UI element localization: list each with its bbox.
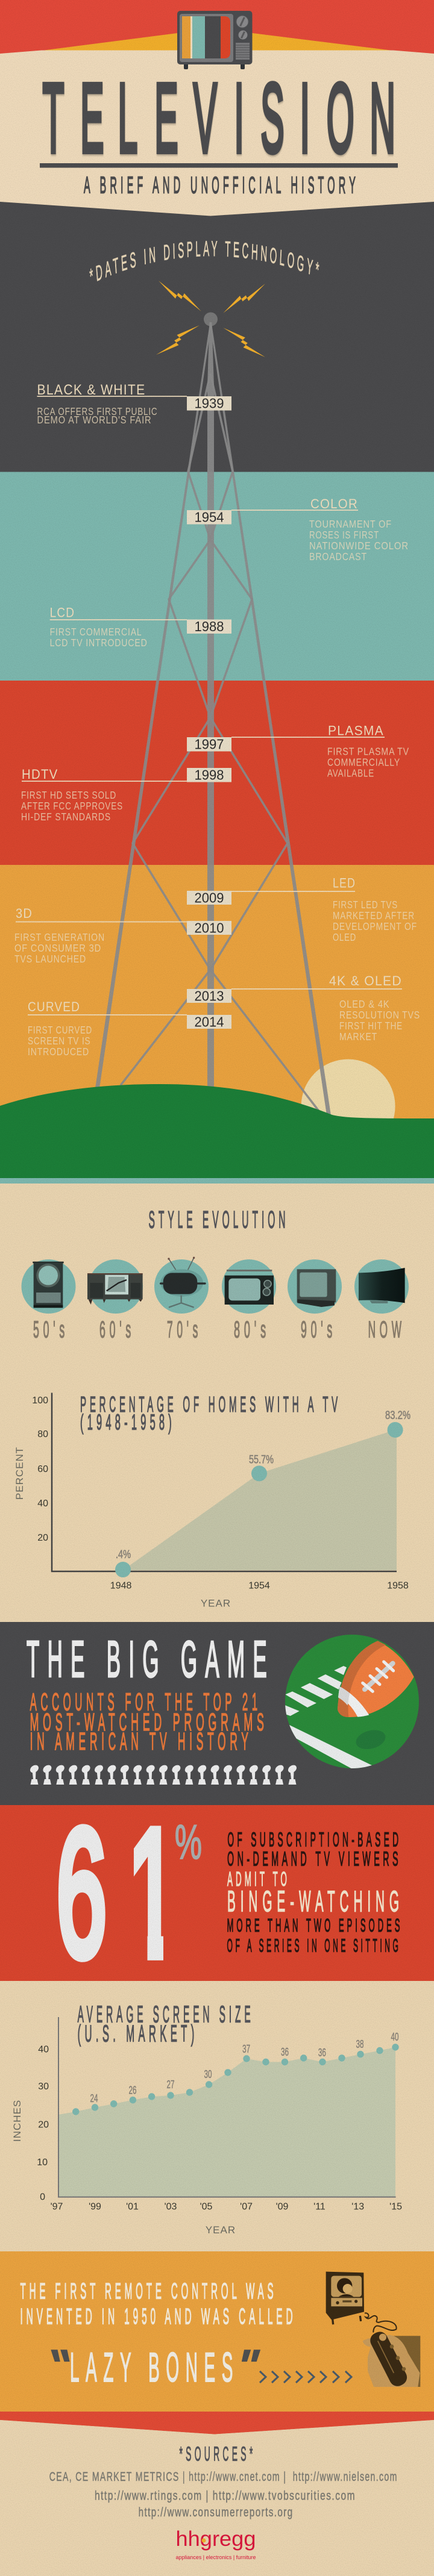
y axis labels: 0	[40, 2192, 45, 2203]
chart: percentage of homes with a tv	[14, 1392, 410, 1609]
x axis labels: '09	[276, 2202, 289, 2212]
x axis labels	[51, 2202, 402, 2212]
timeline: 1939 black and white: RCA OFFERS FIRST PUBLIC	[37, 405, 158, 417]
data labels: 37	[242, 2043, 250, 2055]
data labels: 27	[166, 2079, 175, 2091]
x axis title: YEAR	[206, 2224, 236, 2236]
y axis labels: 100	[32, 1396, 48, 1406]
data labels: 40	[391, 2031, 399, 2043]
chevron arrows	[260, 2371, 351, 2383]
timeline: 2010 3d: OF CONSUMER 3D	[14, 942, 101, 954]
y axis labels: 20	[37, 1533, 48, 1543]
timeline: 2010 3d	[14, 906, 231, 965]
data labels: 55.7%	[249, 1454, 274, 1466]
timeline: 2014 curved: SCREEN TV IS	[28, 1035, 90, 1047]
x axis labels: '15	[389, 2202, 402, 2212]
icon: retro television	[177, 11, 252, 69]
y axis labels: 10	[37, 2157, 48, 2168]
decade labels: 50's	[33, 1317, 69, 1343]
chart title	[80, 1392, 341, 1435]
timeline: 1954 color: BROADCAST	[309, 550, 367, 563]
y axis title: PERCENT	[14, 1447, 25, 1500]
section background: cream footer	[0, 2420, 434, 2576]
timeline: 2009 led: OLED	[333, 931, 356, 943]
icon: 1990s set	[297, 1269, 336, 1307]
timeline: 1939 black and white	[37, 382, 231, 426]
timeline: 1954 color	[187, 496, 409, 563]
icon: tv styles 80s 90s now	[225, 1268, 405, 1307]
x axis labels: 1958	[387, 1580, 409, 1591]
data labels: 24	[90, 2092, 98, 2104]
timeline: 2014 curved: CURVED	[28, 999, 80, 1014]
timeline: 2009 led: LED	[333, 876, 356, 890]
section background: red	[0, 681, 434, 865]
timeline: 1988 lcd: FIRST COMMERCIAL	[50, 626, 142, 638]
icon: twenty one trophies	[29, 1764, 298, 1785]
curved heading: dates in display technology: *DATES IN DISPLAY TECHNOLOGY*	[89, 241, 319, 281]
data labels: 36	[318, 2047, 326, 2059]
timeline: 2014 curved	[28, 999, 231, 1058]
section background: orange	[0, 865, 434, 1124]
timeline: 1998 hdtv: AFTER FCC APPROVES	[21, 800, 123, 812]
y axis labels	[37, 2045, 49, 2203]
timeline: 2010 3d: 2010	[194, 920, 224, 936]
chart axes	[52, 1392, 397, 1571]
chart axes	[58, 2017, 396, 2197]
x axis labels: '03	[165, 2202, 177, 2212]
y axis labels: 40	[37, 1499, 48, 1509]
timeline: 1939 black and white: DEMO AT WORLD'S FAIR	[37, 414, 152, 426]
decade labels: 70's	[167, 1317, 202, 1343]
x axis labels: '97	[51, 2202, 63, 2212]
x axis labels	[110, 1580, 409, 1591]
timeline: 2013 4k and oled: 2013	[194, 988, 224, 1003]
y axis labels: 60	[37, 1464, 48, 1474]
timeline: 1939 black and white: 1939	[194, 395, 224, 411]
decade labels	[33, 1317, 406, 1343]
title: TELEVISION	[43, 63, 395, 173]
x axis title: YEAR	[201, 1597, 231, 1609]
timeline: 2009 led: FIRST LED TVS	[333, 899, 398, 911]
timeline: 2014 curved: INTRODUCED	[28, 1046, 89, 1058]
teal circles behind tv styles	[22, 1259, 409, 1314]
icon: lightning bolts	[154, 277, 268, 361]
timeline: 1998 hdtv: HDTV	[22, 767, 58, 782]
icon: 1950s cabinet	[33, 1262, 64, 1308]
data points	[115, 1422, 403, 1577]
x axis labels: '05	[200, 2202, 213, 2212]
chart area fill	[58, 2047, 395, 2197]
timeline: 2014 curved: FIRST CURVED	[28, 1024, 92, 1036]
data labels: 36	[281, 2046, 289, 2058]
logo: hhgregg: hhgregg	[176, 2527, 256, 2551]
timeline: 2009 led	[187, 876, 417, 943]
y axis labels: 40	[38, 2045, 49, 2055]
big number 61	[57, 1793, 178, 1994]
title rule	[40, 163, 398, 167]
icon: curved flat screen	[359, 1268, 405, 1303]
green hill	[0, 1084, 434, 1178]
decade labels: 90's	[301, 1317, 336, 1343]
timeline: 1998 hdtv: FIRST HD SETS SOLD	[21, 789, 116, 801]
chart title: (U.S. MARKET)	[78, 2021, 198, 2047]
percent sign: %	[175, 1815, 202, 1870]
timeline: 1997 plasma: FIRST PLASMA TV	[327, 746, 409, 758]
timeline: 1954 color: 1954	[194, 510, 224, 525]
red chevron band	[0, 2412, 434, 2434]
timeline: 1954 color: TOURNAMENT OF	[309, 518, 392, 530]
logo: hhgregg: appliances | electronics | furniture	[176, 2554, 256, 2560]
text: first remote control	[20, 2279, 297, 2328]
data labels: .4%	[116, 1548, 131, 1561]
timeline: 1998 hdtv: HI-DEF STANDARDS	[21, 811, 111, 823]
y axis labels: 30	[38, 2082, 49, 2092]
icon: tv styles 50s 60s 70s	[33, 1257, 206, 1308]
timeline: 2013 4k and oled	[187, 973, 420, 1043]
quotation marks	[46, 2341, 266, 2392]
teal strip	[0, 1178, 434, 1184]
timeline: 2013 4k and oled: OLED & 4K	[339, 998, 389, 1010]
timeline: 1988 lcd: 1988	[194, 619, 224, 634]
quotation marks: "	[230, 2341, 266, 2392]
chart area fill	[123, 1430, 397, 1570]
timeline: 1997 plasma	[187, 723, 409, 779]
y axis labels: 20	[38, 2120, 49, 2130]
big number 61: 1	[128, 1793, 178, 1994]
x axis labels: '07	[240, 2202, 253, 2212]
y axis title: INCHES	[11, 2100, 23, 2142]
section background: cream screen size	[0, 1981, 434, 2251]
panel: binge watching	[0, 1793, 434, 1994]
timeline connector lines	[16, 396, 402, 1015]
sun	[301, 1059, 395, 1118]
text: source list: http://www.consumerreports.org	[139, 2506, 294, 2519]
timeline: 1988 lcd: LCD	[50, 605, 75, 620]
panel: the big game	[0, 1622, 434, 1805]
panel: lazy bones remote	[0, 2251, 434, 2412]
text: binge watching statement	[227, 1829, 404, 1956]
timeline: 1939 black and white: BLACK & WHITE	[37, 382, 146, 398]
broadcast tower	[95, 312, 332, 1117]
y axis labels	[32, 1396, 48, 1543]
timeline: 1997 plasma: 1997	[194, 736, 224, 752]
decade labels: 80's	[234, 1317, 270, 1343]
timeline: 2014 curved: 2014	[194, 1014, 224, 1030]
timeline: 2010 3d: 3D	[16, 906, 33, 921]
section background: cream title panel	[0, 51, 434, 216]
icon: 1960s console	[87, 1273, 143, 1305]
timeline: 1954 color: ROSES IS FIRST	[309, 529, 379, 541]
timeline: 2010 3d: FIRST GENERATION	[14, 931, 105, 943]
x axis labels: '01	[126, 2202, 139, 2212]
timeline: 2009 led: 2009	[194, 890, 224, 906]
timeline: 1998 hdtv: 1998	[194, 767, 224, 783]
data labels	[116, 1409, 410, 1561]
chart title: (1948-1958)	[80, 1409, 175, 1435]
timeline: 1997 plasma: PLASMA	[328, 723, 384, 738]
data labels	[90, 2031, 399, 2104]
timeline: 1954 color: COLOR	[310, 496, 358, 511]
section background: teal	[0, 472, 434, 681]
x axis labels: 1948	[110, 1580, 131, 1591]
chart title	[78, 2002, 254, 2047]
data labels: 30	[204, 2068, 212, 2080]
timeline: 1997 plasma: COMMERCIALLY	[327, 756, 400, 769]
timeline: 1988 lcd: LCD TV INTRODUCED	[50, 637, 148, 649]
decade labels: 60's	[99, 1317, 135, 1343]
timeline: 1954 color: NATIONWIDE COLOR	[309, 540, 409, 552]
timeline: 1997 plasma: AVAILABLE	[327, 767, 374, 779]
x axis labels: '13	[351, 2202, 364, 2212]
text: *SOURCES*	[180, 2443, 256, 2465]
icon: football on field	[283, 1635, 419, 1770]
text: source list	[49, 2470, 398, 2519]
timeline: 2013 4k and oled: MARKET	[339, 1031, 377, 1043]
chart: average screen size	[11, 2002, 402, 2236]
x axis labels: '99	[89, 2202, 101, 2212]
quotation marks: "	[46, 2341, 81, 2392]
timeline: 2013 4k and oled: FIRST HIT THE	[339, 1020, 403, 1032]
timeline: 1998 hdtv	[21, 767, 231, 823]
section background: dark display technology	[0, 202, 434, 472]
data labels: 38	[356, 2038, 364, 2050]
icon: 1980s portable	[225, 1270, 274, 1305]
section background: red header	[0, 0, 434, 60]
y axis labels: 80	[37, 1429, 48, 1439]
timeline: 1988 lcd	[50, 605, 231, 649]
section background: cream evolution and homes	[0, 1184, 434, 1622]
x axis labels: 1954	[248, 1580, 270, 1591]
timeline: 2013 4k and oled: 4K & OLED	[329, 973, 402, 988]
logo: hhgregg	[176, 2527, 256, 2560]
icon: 1970s space age	[160, 1257, 206, 1308]
text: binge watching statement: ADMIT TO	[227, 1868, 290, 1890]
icon: vintage tv with remote in hand	[326, 2272, 420, 2389]
data labels: 26	[129, 2084, 136, 2096]
timeline: 2010 3d: TVS LAUNCHED	[14, 953, 86, 965]
yellow roof band	[42, 33, 393, 51]
data points	[72, 2044, 399, 2115]
big number 61: 6	[57, 1793, 107, 1994]
x axis labels: '11	[313, 2202, 326, 2212]
data labels: 83.2%	[385, 1409, 410, 1422]
text: accounts for top programs	[30, 1688, 268, 1755]
